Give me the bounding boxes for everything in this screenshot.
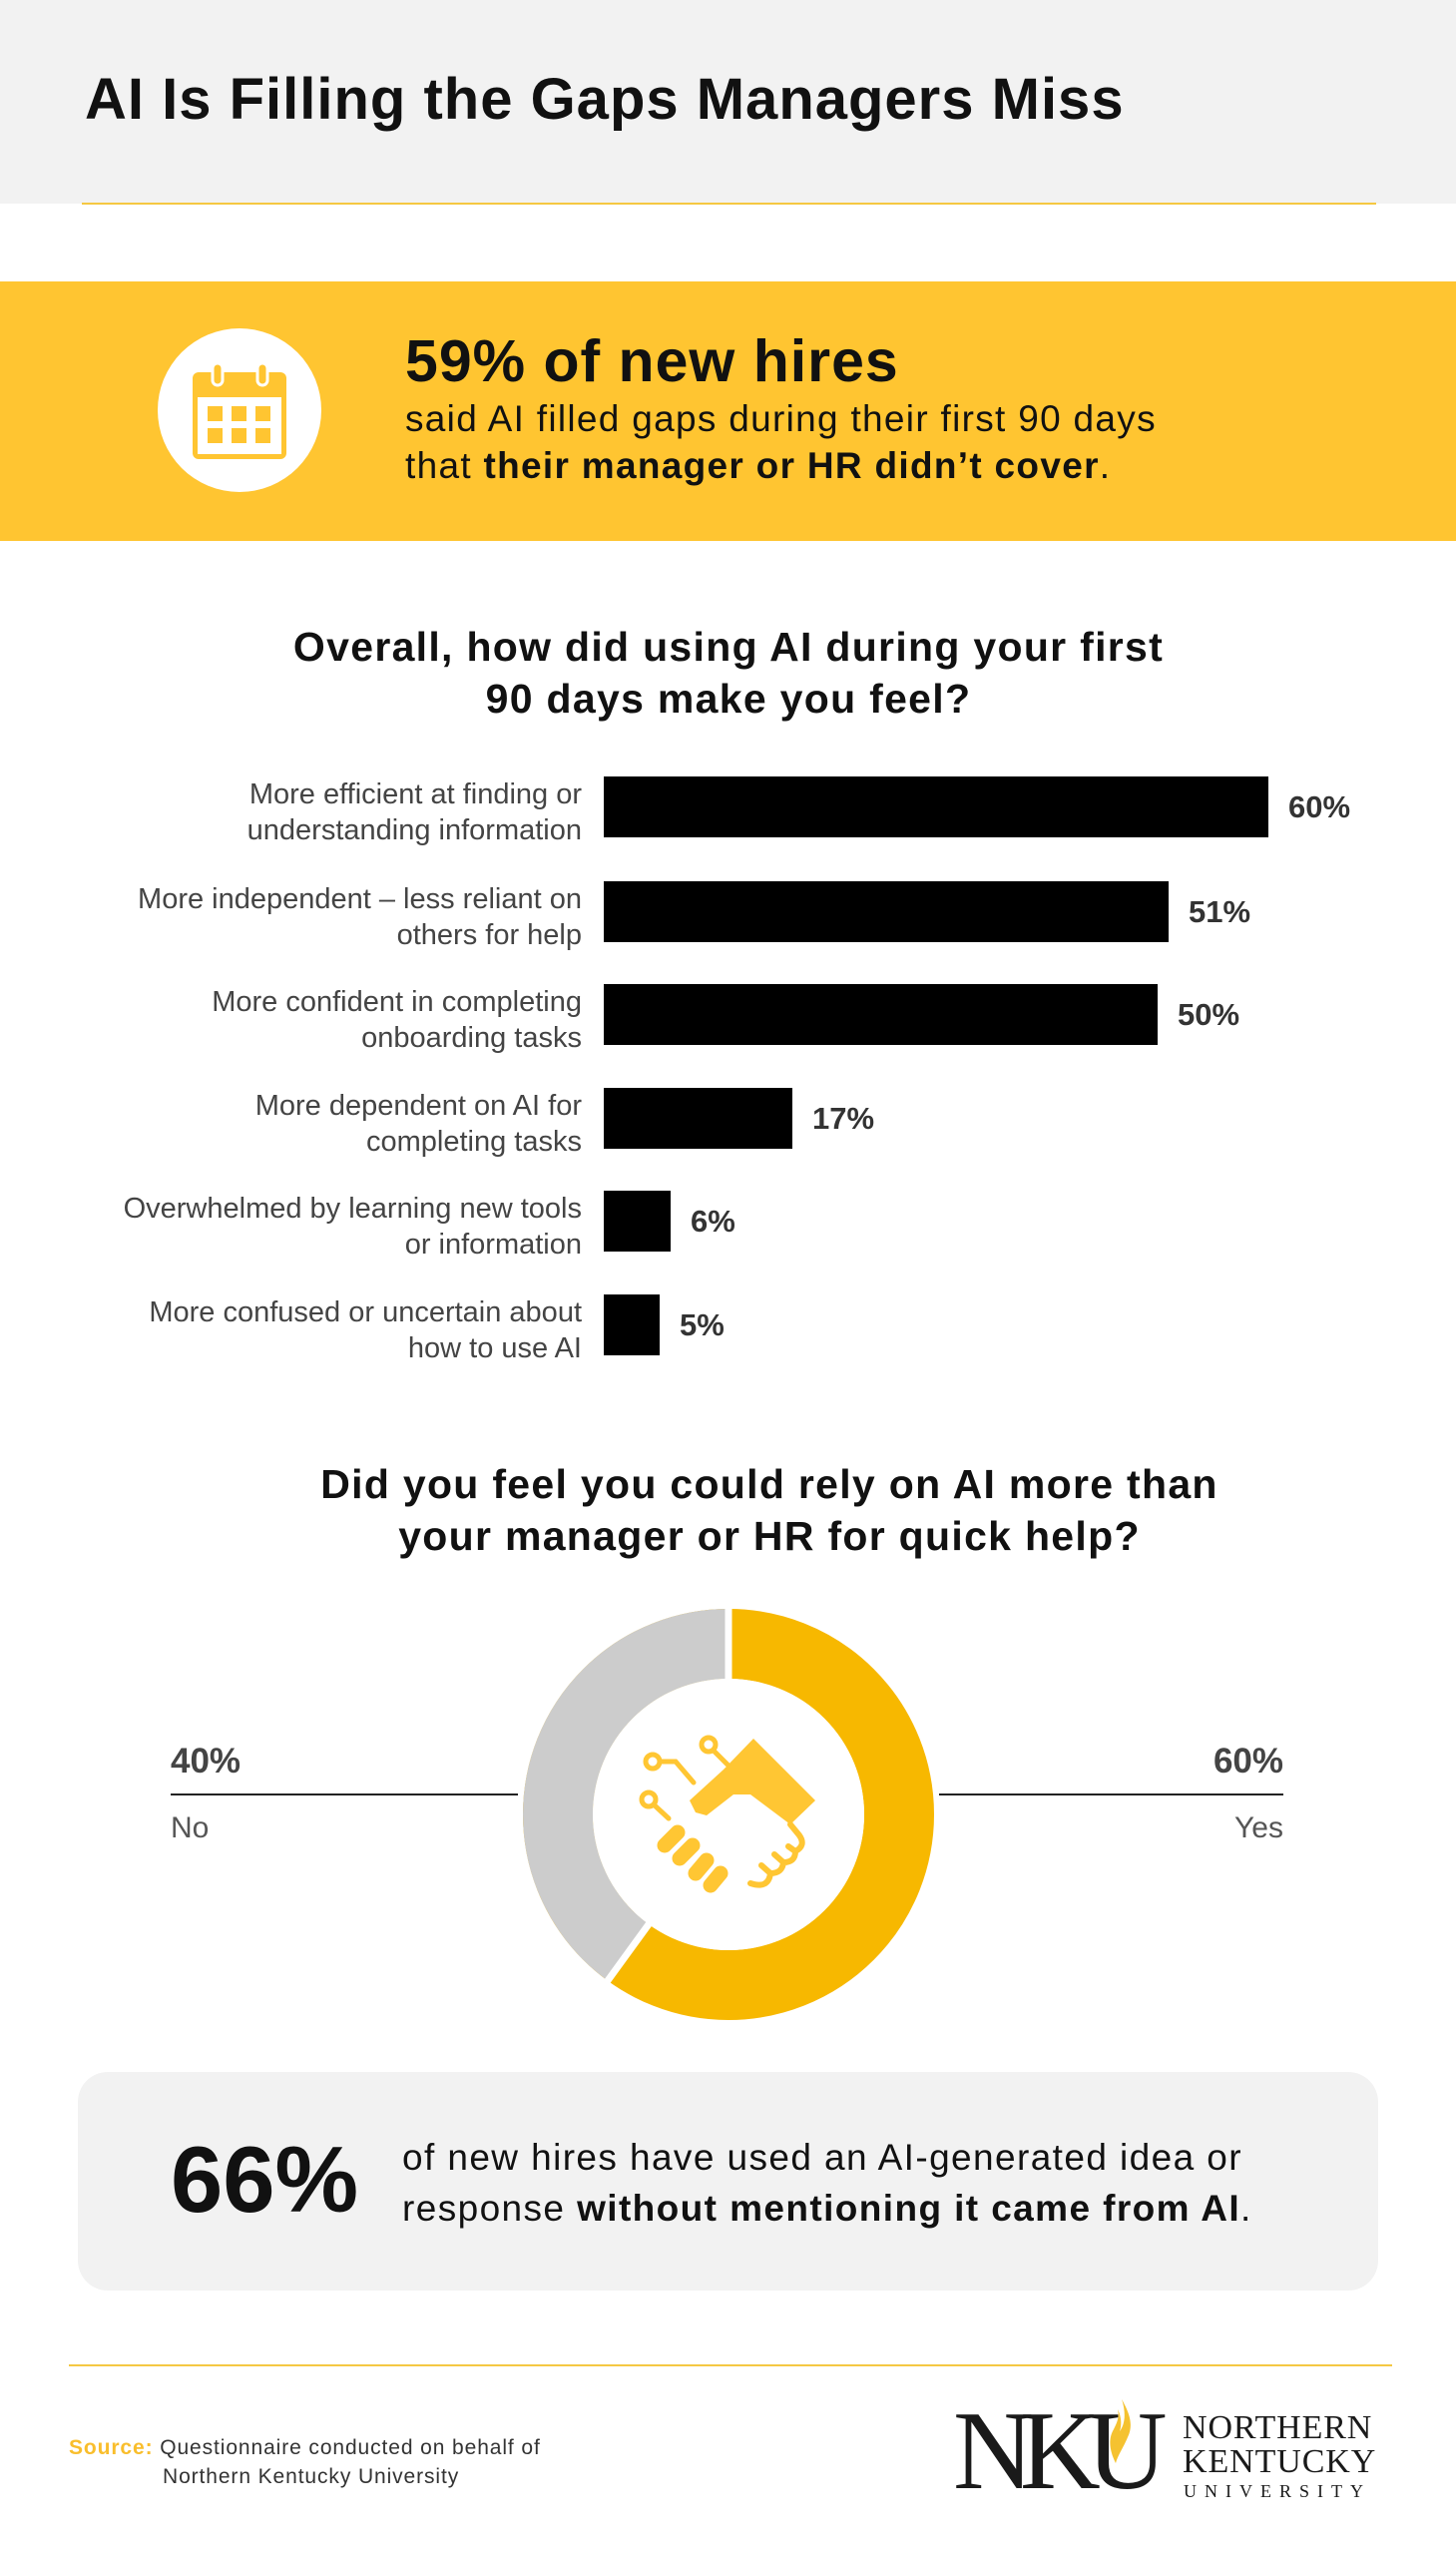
bar chart: understanding information — [247, 814, 582, 846]
logo: NKU: NKU — [953, 2389, 1154, 2513]
label: yes 60%: 60% — [1213, 1742, 1283, 1781]
header band — [0, 0, 1456, 204]
stat text: that their manager or HR didn’t cover. — [405, 445, 1111, 486]
donut chart: No — [171, 1811, 209, 1844]
callout box: 66% — [78, 2072, 1378, 2291]
logo: NKU: UNIVERSITY — [1184, 2481, 1371, 2501]
bar chart: More confident in completing — [212, 986, 582, 1018]
question 1 heading: 90 days make you feel? — [486, 676, 971, 722]
source: Northern Kentucky University — [163, 2465, 459, 2488]
bar chart: 51% — [1189, 894, 1250, 929]
bar chart: 5% — [680, 1307, 725, 1342]
callout box: 66%: 66% — [171, 2127, 358, 2232]
callout box: 66%: response without mentioning it came from AI. — [402, 2188, 1252, 2229]
question 1 heading: Overall, how did using AI during your first — [293, 624, 1164, 670]
bar chart: 60% — [1288, 789, 1350, 824]
source — [69, 2436, 541, 2488]
donut chart: Yes — [1234, 1811, 1283, 1844]
callout box: 66%: of new hires have used an AI-generated idea or — [402, 2137, 1242, 2178]
bar chart: More confused or uncertain about — [149, 1296, 582, 1328]
title: AI Is Filling the Gaps Managers Miss — [85, 67, 1125, 132]
bar chart: Overwhelmed by learning new tools — [124, 1193, 582, 1225]
bar chart: More efficient at finding or — [249, 778, 582, 810]
logo: NKU — [953, 2389, 1376, 2513]
bar chart: others for help — [397, 919, 582, 951]
bar chart: More independent – less reliant on — [138, 883, 582, 915]
icon: handshake — [642, 1738, 815, 1885]
question 1 heading — [293, 624, 1164, 722]
bar chart: 17% — [812, 1101, 874, 1136]
logo: NKU: KENTUCKY — [1183, 2443, 1376, 2480]
stat band: 59% — [0, 281, 1456, 541]
bar chart: completing tasks — [366, 1126, 582, 1158]
label: no 40%: 40% — [171, 1742, 241, 1781]
stat text: 59% of new hires — [405, 328, 899, 394]
bar chart: 6% — [691, 1204, 735, 1239]
bar chart: 50% — [1178, 997, 1239, 1032]
question 2 heading: your manager or HR for quick help? — [398, 1513, 1141, 1559]
question 2 heading: Did you feel you could rely on AI more than — [320, 1461, 1218, 1507]
icon: calendar — [158, 328, 321, 492]
bar chart: onboarding tasks — [361, 1022, 582, 1054]
donut chart — [171, 1609, 1283, 2020]
source: Source: Questionnaire conducted on behalf of — [69, 2436, 541, 2459]
bar chart — [124, 776, 1350, 1364]
bar chart: or information — [405, 1229, 582, 1261]
bar chart: More dependent on AI for — [255, 1090, 582, 1122]
stat text — [405, 328, 1157, 486]
stat text: said AI filled gaps during their first 90 days — [405, 398, 1157, 439]
logo: NKU: NORTHERN — [1183, 2409, 1372, 2446]
bar chart: how to use AI — [408, 1332, 582, 1364]
question 2 heading — [320, 1461, 1218, 1559]
